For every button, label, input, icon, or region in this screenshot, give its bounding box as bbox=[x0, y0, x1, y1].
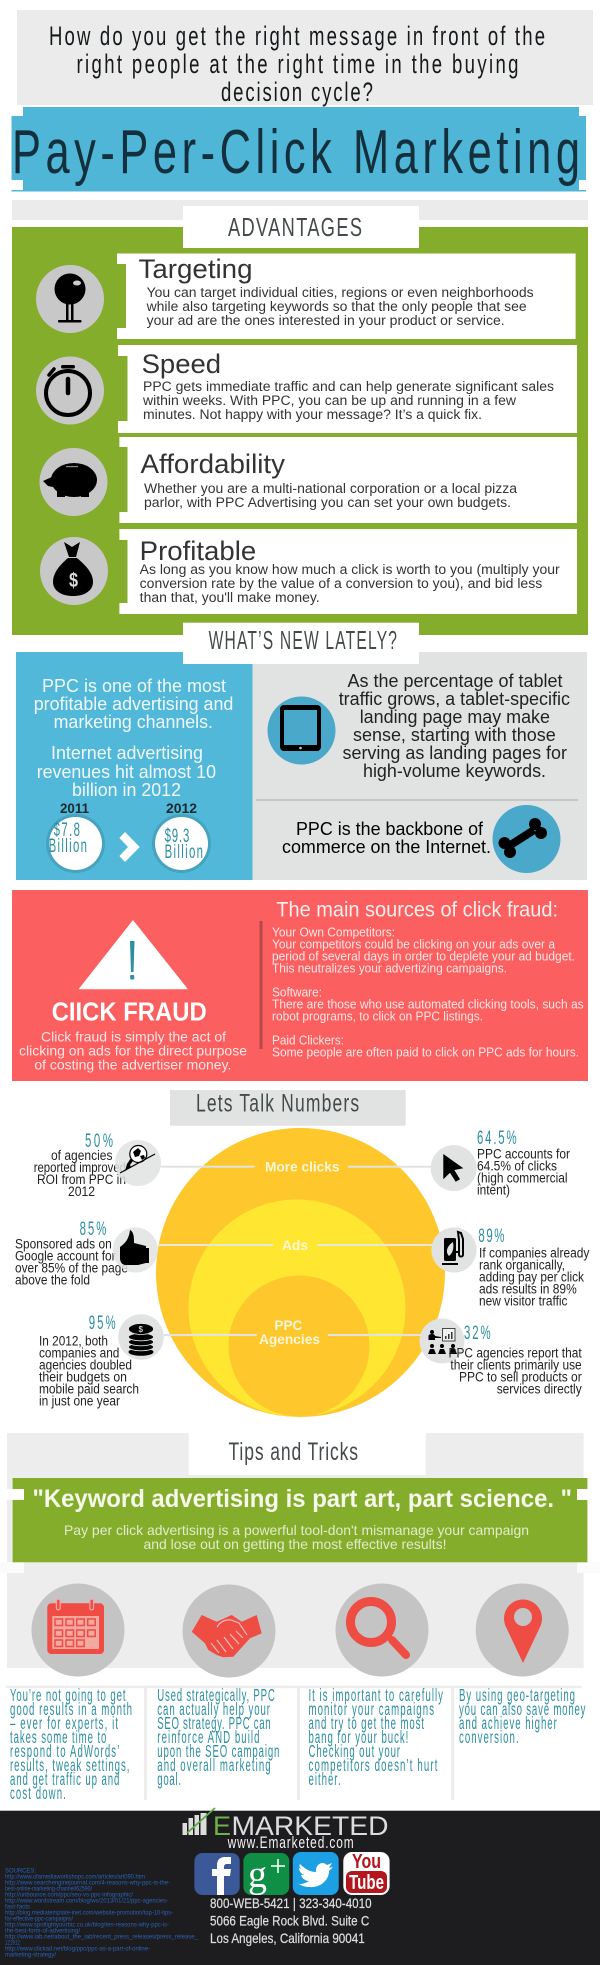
heading: tips and tricks bbox=[189, 1433, 426, 1475]
logo: emarketed bbox=[182, 1808, 388, 1841]
panel: footer bbox=[0, 1808, 600, 1965]
chart: 2012 revenue: $9.3 bbox=[165, 826, 190, 847]
heading: lets talk numbers: Lets Talk Numbers bbox=[196, 1089, 359, 1117]
icon: coin stack bbox=[118, 1314, 164, 1360]
stat: 64.5%: intent) bbox=[477, 1183, 510, 1198]
card: targeting: your ad are the ones interested in your product or service. bbox=[147, 313, 505, 328]
tip text: results take time: – ever for experts, it bbox=[10, 1713, 118, 1733]
stat: 85%: over 85% of the page bbox=[15, 1261, 128, 1276]
logo: emarketed: E bbox=[213, 1811, 231, 1841]
text: revenues bbox=[37, 743, 216, 800]
tip text: geo-targeting bbox=[459, 1685, 586, 1747]
icon: piggy bank bbox=[40, 448, 108, 516]
sources list: marketing-strategy/ bbox=[5, 1952, 56, 1958]
heading: what's new lately bbox=[183, 623, 419, 664]
stat: 89%: adding pay per click bbox=[479, 1269, 584, 1284]
sources list: http://www.ofamediaworkshops.com/articles/art090.htm bbox=[5, 1874, 145, 1880]
heading: main sources: The main sources of click fraud: bbox=[276, 899, 558, 922]
text: ppc profitable: profitable advertising and bbox=[34, 694, 233, 714]
stat: 85%: Google account for bbox=[15, 1249, 116, 1264]
chart: concentric circles: PPC bbox=[274, 1317, 302, 1333]
stat: 32%: their clients primarily use bbox=[450, 1358, 582, 1373]
stat: 50%: 50% bbox=[85, 1131, 113, 1152]
card: affordability: Affordability bbox=[140, 449, 286, 479]
text: backbone: commerce on the Internet. bbox=[282, 837, 491, 857]
icon: man pushing globe bbox=[115, 1140, 161, 1186]
stat: 50%: of agencies bbox=[51, 1148, 113, 1163]
tip text: seo strategy: reinforce AND build bbox=[157, 1727, 259, 1747]
sources list: http://blog.mediatemplate-inet.com/website-promotion/top-10-tips- bbox=[5, 1910, 173, 1916]
tip text: monitor campaigns bbox=[308, 1685, 444, 1789]
chart: 2011 revenue: 2011 bbox=[60, 800, 89, 816]
chart: 2011 revenue bbox=[46, 800, 105, 873]
question text: right people at the right time in the buying bbox=[76, 49, 518, 79]
stat: 95%: companies and bbox=[39, 1346, 119, 1361]
tip text: geo-targeting: and achieve higher bbox=[459, 1713, 557, 1733]
header panel: question bbox=[17, 10, 593, 107]
card: speed bbox=[118, 345, 577, 433]
sources list: http://www.searchenginejournal.com/4-reasons-why-ppc-is-the- bbox=[5, 1880, 170, 1886]
text: sources of fraud: robot programs, to click on PPC listings. bbox=[272, 1009, 483, 1024]
icon: handshake bbox=[182, 1584, 276, 1678]
icon: presentation people bbox=[420, 1318, 464, 1364]
text: sources of fraud: period of several days in order to deplete your ad budget. bbox=[272, 949, 575, 964]
tip text: monitor campaigns: either. bbox=[309, 1769, 341, 1789]
stat: 32%: services directly bbox=[497, 1382, 582, 1397]
icon: youtube: Tube bbox=[349, 1872, 384, 1894]
card: speed: minutes. Not happy with your message? It’s a quick fix. bbox=[143, 407, 482, 422]
card: targeting bbox=[117, 254, 576, 339]
text: tablet landing page: sense, starting with those bbox=[353, 725, 556, 745]
text: sources of fraud: Your competitors could be clicking on your ads over a bbox=[272, 937, 556, 952]
stat: 32% bbox=[448, 1323, 582, 1397]
text: tablet landing page: high-volume keywords. bbox=[363, 761, 546, 781]
panel: advantages bbox=[12, 200, 588, 635]
sources list: http://www.spotlightyourbiz.co.uk/blog/ten-reasons-why-ppc-is- bbox=[5, 1922, 169, 1928]
tip text: monitor campaigns: competitors doesn’t hurt bbox=[309, 1755, 437, 1775]
tip text: results take time: and get traffic up and bbox=[10, 1769, 119, 1789]
title banner: Pay-Per-Click Marketing bbox=[12, 119, 580, 187]
icon: calendar bbox=[32, 1584, 124, 1676]
question text: How do you get the right message in front of the bbox=[49, 21, 545, 51]
question text: decision cycle? bbox=[221, 77, 373, 107]
chart: 2012 revenue bbox=[152, 800, 211, 873]
logo: emarketed: MARKETED bbox=[232, 1811, 388, 1841]
text: revenues: revenues hit almost 10 bbox=[37, 762, 216, 782]
text: click fraud definition: clicking on ads for the direct purpose bbox=[19, 1043, 247, 1059]
icon: map pin bbox=[476, 1584, 569, 1676]
chart: 2011 revenue: Billion bbox=[49, 836, 87, 857]
card: profitable: As long as you know how much a click is worth to you (multiply your bbox=[140, 562, 560, 577]
tip text: monitor campaigns: monitor your campaigns bbox=[309, 1699, 434, 1719]
tip text: monitor campaigns: bang for your buck! bbox=[309, 1727, 408, 1747]
heading: click fraud: CIICK FRAUD bbox=[52, 997, 207, 1027]
text: revenues: Internet advertising bbox=[51, 743, 203, 763]
sources list: for-effective-ppc-campaigns/ bbox=[5, 1916, 73, 1922]
stat: 95%: in just one year bbox=[39, 1394, 120, 1409]
text: tablet landing page: traffic grows, a tablet-specific bbox=[339, 689, 570, 709]
heading: lets talk numbers bbox=[170, 1089, 406, 1126]
chart: concentric circles: More clicks bbox=[265, 1159, 340, 1175]
stat: 95%: mobile paid search bbox=[39, 1382, 139, 1397]
tip text: results take time: You’re not going to get bbox=[10, 1685, 126, 1705]
tip text: results take time: cost down. bbox=[10, 1783, 66, 1803]
sources list: http://unbounce.com/ppc/seo-vs-ppc-infographic/ bbox=[5, 1892, 133, 1898]
tip text: monitor campaigns: and try to get the most bbox=[309, 1713, 424, 1733]
text: tablet landing page: As the percentage of tablet bbox=[348, 671, 562, 691]
panel: tips and tricks bbox=[0, 1433, 600, 1803]
stat: 32%: 32% bbox=[464, 1323, 491, 1344]
tip text: seo strategy: goal. bbox=[157, 1769, 181, 1789]
heading: advantages bbox=[183, 206, 419, 248]
chart: concentric circles: Ads bbox=[282, 1237, 308, 1253]
text: sources of fraud: Paid Clickers: bbox=[272, 1033, 344, 1048]
tip text: results take time: good results in a month bbox=[10, 1699, 132, 1719]
stat: 89% bbox=[478, 1226, 590, 1308]
card: affordability: parlor, with PPC Advertising you can set your own budgets. bbox=[144, 495, 511, 510]
text: tablet landing page: landing page may make bbox=[360, 707, 550, 727]
icon: youtube bbox=[343, 1851, 390, 1895]
icon: facebook bbox=[194, 1853, 240, 1895]
stat: 64.5%: (high commercial bbox=[477, 1171, 568, 1186]
stat: 50%: 2012 bbox=[68, 1184, 95, 1199]
card: affordability bbox=[119, 437, 577, 523]
panel: what's new lately bbox=[16, 623, 587, 880]
stat: 85%: 85% bbox=[80, 1219, 106, 1240]
text: ppc profitable: PPC is one of the most bbox=[42, 676, 226, 696]
card: targeting: You can target individual cities, regions or even neighborhoods bbox=[147, 285, 534, 300]
icon: cursor bbox=[431, 1145, 477, 1191]
text: click fraud definition bbox=[19, 1029, 247, 1073]
text: click fraud definition: Click fraud is simply the act of bbox=[41, 1029, 226, 1045]
stat: 95%: agencies doubled bbox=[39, 1358, 132, 1373]
stat: 50%: reported improved bbox=[34, 1160, 126, 1175]
quote banner: Pay per click advertising is a powerful tool-don't mismanage your campaign bbox=[64, 1522, 529, 1538]
card: targeting: while also targeting keywords so that the only people that see bbox=[146, 299, 527, 314]
text: revenues: billion in 2012 bbox=[72, 780, 181, 800]
icon: warning triangle bbox=[78, 920, 188, 989]
heading: tips and tricks: Tips and Tricks bbox=[229, 1437, 358, 1466]
sources list: http://www.wordstream.com/blog/ws/2013/01/21/ppc-agencies- bbox=[5, 1898, 168, 1904]
stat: 50% bbox=[34, 1131, 126, 1199]
quote banner: and lose out on getting the most effective results! bbox=[144, 1536, 446, 1552]
sources list: best-online-marketing-channel/62590/ bbox=[5, 1886, 92, 1892]
sources list: http://www.clickad.net/blog/ppc/ppc-as-a-part-of-online- bbox=[5, 1946, 150, 1952]
tip text: results take time bbox=[10, 1685, 132, 1803]
sources list: SOURCES: bbox=[5, 1868, 36, 1874]
tip text: results take time: respond to AdWords’ bbox=[10, 1741, 119, 1761]
icon: pushpin bbox=[36, 265, 104, 333]
contact details bbox=[210, 1895, 372, 1946]
text: tablet landing page bbox=[339, 671, 570, 781]
stat: 89%: rank organically, bbox=[479, 1257, 565, 1272]
text: click fraud definition: of costing the advertiser money. bbox=[34, 1057, 231, 1073]
chart: concentric circles: Agencies bbox=[259, 1331, 320, 1347]
text: ppc profitable: marketing channels. bbox=[54, 712, 213, 732]
panel: lets talk numbers bbox=[15, 1089, 590, 1417]
stat: 89%: If companies already bbox=[479, 1245, 590, 1260]
stat: 32%: PPC to sell products or bbox=[459, 1370, 582, 1385]
stat: 89%: 89% bbox=[478, 1226, 504, 1247]
chart: 2011 revenue: $7.8 bbox=[54, 820, 80, 841]
icon: google plus: g bbox=[248, 1854, 267, 1896]
icon: money bag: $ bbox=[69, 570, 78, 592]
sources list: the-best-form-of-advertising/ bbox=[5, 1928, 80, 1934]
quote banner: "Keyword advertising is part art, part science. " bbox=[32, 1485, 572, 1513]
sources list: 121912 bbox=[5, 1940, 20, 1946]
sources list bbox=[5, 1868, 199, 1958]
icon: thumbs up bbox=[113, 1227, 158, 1273]
tip text: geo-targeting: By using geo-targeting bbox=[459, 1685, 575, 1705]
stat: 64.5%: PPC accounts for bbox=[477, 1147, 570, 1162]
text: backbone: PPC is the backbone of bbox=[296, 819, 484, 839]
tip text: seo strategy: Used strategically, PPC bbox=[157, 1685, 275, 1705]
tip text: results take time: takes some time to bbox=[10, 1727, 107, 1747]
stat: 95%: 95% bbox=[89, 1313, 116, 1334]
tip text: seo strategy: upon the SEO campaign bbox=[157, 1741, 279, 1761]
tip text: seo strategy: can actually help your bbox=[157, 1699, 270, 1719]
card: profitable: Profitable bbox=[140, 536, 256, 566]
text: sources of fraud: Your Own Competitors: bbox=[272, 925, 395, 940]
text: sources of fraud bbox=[272, 925, 584, 1060]
stat: 85%: Sponsored ads on bbox=[15, 1237, 112, 1252]
text: sources of fraud: Software: bbox=[272, 985, 322, 1000]
icon: google plus bbox=[243, 1853, 289, 1896]
card: profitable: than that, you'll make money. bbox=[140, 590, 320, 605]
icon: gas pump bbox=[431, 1227, 477, 1273]
tip text: geo-targeting: you can also save money bbox=[459, 1699, 586, 1719]
icon: youtube: You bbox=[352, 1851, 381, 1873]
chart: concentric circles bbox=[156, 1128, 445, 1417]
text: website url: www.Emarketed.com bbox=[227, 1834, 354, 1853]
sources list: fast-facts bbox=[5, 1904, 30, 1910]
stat: 85%: above the fold bbox=[15, 1273, 90, 1288]
stat: 89%: ads results in 89% bbox=[479, 1281, 577, 1296]
stat: 32%: PPC agencies report that bbox=[448, 1346, 582, 1361]
card: speed: within weeks. With PPC, you can be up and running in a few bbox=[142, 393, 516, 408]
chart: 2012 revenue: 2012 bbox=[166, 800, 197, 816]
heading: advantages: ADVANTAGES bbox=[228, 213, 362, 242]
text: tablet landing page: serving as landing pages for bbox=[342, 743, 567, 763]
stat: 95%: In 2012, both bbox=[39, 1334, 108, 1349]
sources list: http://www.iab.net/about_the_iab/recent_press_releases/press_release_ bbox=[5, 1934, 199, 1940]
card: affordability: Whether you are a multi-national corporation or a local pizza bbox=[144, 481, 518, 496]
icon: bone bbox=[492, 805, 560, 873]
stat: 64.5% bbox=[477, 1128, 570, 1198]
stat: 64.5%: 64.5% of clicks bbox=[477, 1159, 557, 1174]
stat: 95%: their budgets on bbox=[39, 1370, 127, 1385]
text: ppc profitable bbox=[34, 676, 233, 732]
tip text: monitor campaigns: Checking out your bbox=[309, 1741, 400, 1761]
quote banner bbox=[0, 1478, 600, 1562]
card: profitable: conversion rate by the value of a conversion to you), and bid less bbox=[140, 576, 542, 591]
contact details: 5066 Eagle Rock Blvd. Suite C bbox=[210, 1913, 369, 1929]
text: sources of fraud: This neutralizes your advertizing campaigns. bbox=[272, 961, 507, 976]
card: speed: Speed bbox=[142, 349, 221, 379]
icon: tablet bbox=[268, 696, 336, 764]
stat: 50%: ROI from PPC in bbox=[37, 1172, 126, 1187]
stat: 89%: new visitor traffic bbox=[479, 1293, 568, 1308]
tip text: seo strategy: and overall marketing bbox=[157, 1755, 271, 1775]
chart: 2012 revenue: Billion bbox=[165, 842, 203, 863]
panel: click fraud bbox=[12, 890, 588, 1081]
heading: what's new lately: WHAT’S NEW LATELY? bbox=[209, 626, 397, 655]
text: sources of fraud: Some people are often paid to click on PPC ads for hours. bbox=[272, 1045, 579, 1060]
stat: 85% bbox=[15, 1219, 128, 1288]
icon: stopwatch bbox=[36, 356, 104, 424]
arrow: chevron bbox=[119, 832, 140, 862]
stat: 64.5%: 64.5% bbox=[477, 1128, 517, 1149]
text: backbone bbox=[282, 819, 491, 857]
contact details: 800-WEB-5421 | 323-340-4010 bbox=[210, 1895, 372, 1911]
card: targeting: Targeting bbox=[138, 254, 252, 284]
icon: money bag bbox=[40, 537, 108, 605]
stat: 95% bbox=[39, 1313, 139, 1409]
card: profitable bbox=[119, 529, 577, 614]
tip text: seo strategy: SEO strategy. PPC can bbox=[157, 1713, 271, 1733]
tip text: seo strategy bbox=[157, 1685, 279, 1789]
tip text: results take time: results, tweak settings, bbox=[10, 1755, 129, 1775]
contact details: Los Angeles, California 90041 bbox=[210, 1930, 365, 1946]
icon: magnifying glass bbox=[336, 1584, 428, 1676]
icon: coin stack: $ bbox=[138, 1325, 144, 1334]
icon: twitter bbox=[293, 1852, 339, 1895]
question text bbox=[49, 21, 545, 107]
tip text: monitor campaigns: It is important to carefully bbox=[309, 1685, 444, 1705]
card: speed: PPC gets immediate traffic and can help generate significant sales bbox=[143, 379, 554, 394]
tip text: geo-targeting: conversion. bbox=[459, 1727, 519, 1747]
